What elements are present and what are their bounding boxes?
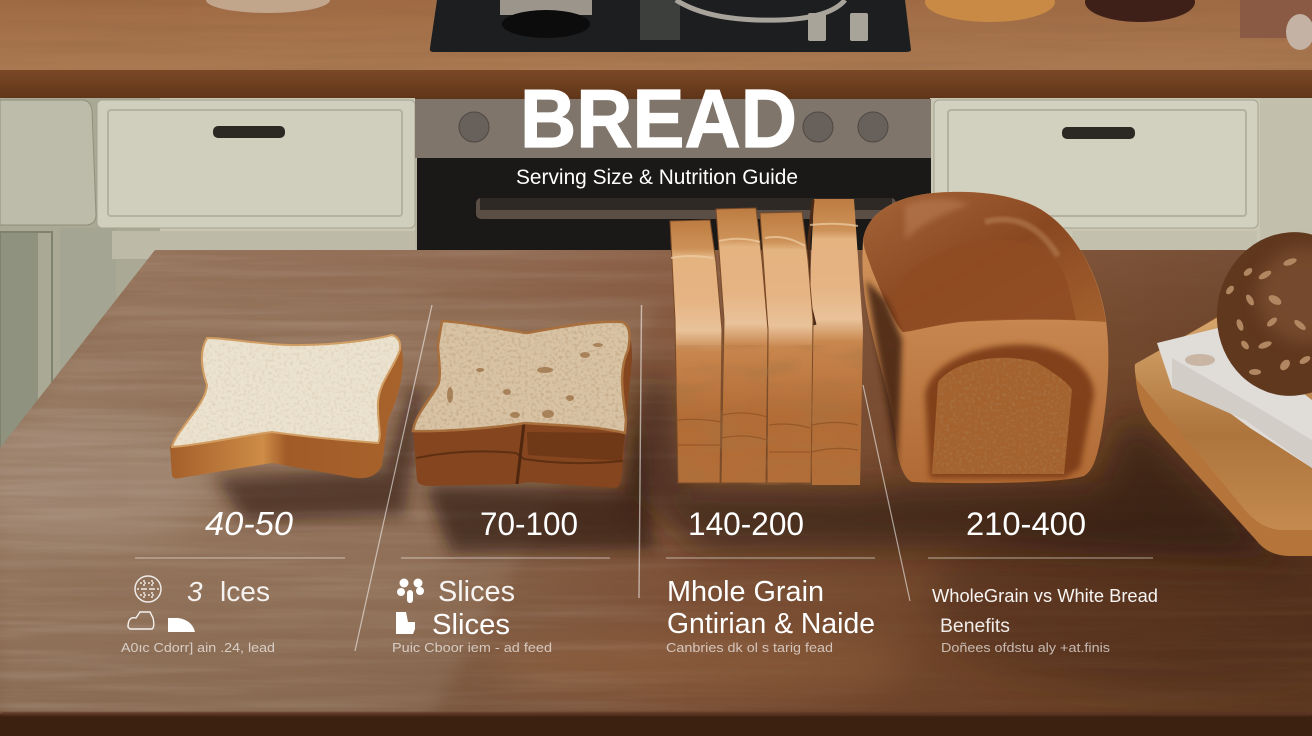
icon: bread slice [168,618,195,632]
loaf body [862,192,1108,483]
icon: scattered pieces [397,578,424,603]
wheat bread, two slices [410,318,635,488]
slices label one: Slices [438,576,515,608]
crust side [170,335,403,479]
loaf shadow side [866,280,902,470]
heading line one: Mhole Grain [667,576,824,608]
crust [413,322,632,488]
whole loaf [862,192,1108,483]
panel: cabinets left [0,98,415,458]
heading line two: Gntirian & Naide [667,608,875,640]
crumb face [172,335,400,447]
paper [1157,328,1312,468]
slices label two: Slices [432,609,510,641]
slice 4 [808,199,863,485]
column 1: 40-50: lces [220,576,270,607]
dark halo inside arch [925,345,1094,478]
detail note: Puic Cboor iem - ad feed [392,640,552,655]
detail note: Canbries dk ol s tarig fead [666,640,833,655]
value: 140-200 [688,506,804,542]
shadows under the breads [215,375,1290,560]
oven [415,99,931,250]
value: 70-100 [480,506,578,542]
board [1135,317,1312,556]
cutting board with seeded loaf [1135,222,1312,556]
heading: WholeGrain vs White Bread [932,585,1158,606]
column 1: 40-50 [121,505,294,655]
slice 2 [716,208,768,483]
slices label: 3 [187,576,203,607]
slice 1 [670,220,722,483]
column dividers [355,305,910,651]
horizontal rules [135,557,1153,559]
counter items [206,0,1312,50]
value: 210-400 [966,506,1086,542]
icon: bread piece [396,612,415,634]
icon: round bread [135,576,161,602]
detail note: A0ıc Cdorr] ain .24, lead [121,640,275,655]
top crust [863,192,1106,332]
detail note: Doñees ofdstu aly +at.finis [941,640,1111,655]
panel: cabinets right [930,98,1312,258]
slice 3 [760,212,813,483]
panel: wooden table [0,250,1312,736]
sliced loaf [665,199,867,487]
value: 40-50 [205,505,294,542]
loaf cut face [932,358,1072,474]
benefits: Benefits [940,616,1010,637]
white bread slice [165,330,405,479]
column 2: 70-100 [392,506,578,655]
panel: upper kitchen counter [0,0,1312,99]
seeded loaf [1206,222,1312,406]
column 3: 140-200 [666,506,875,655]
subtitle: Serving Size & Nutrition Guide [516,166,798,189]
icon: loaf tin [128,612,154,629]
stove top [430,0,911,52]
crumb [413,321,630,433]
title: BREAD [520,72,797,165]
column 4: 210-400 [932,506,1158,655]
